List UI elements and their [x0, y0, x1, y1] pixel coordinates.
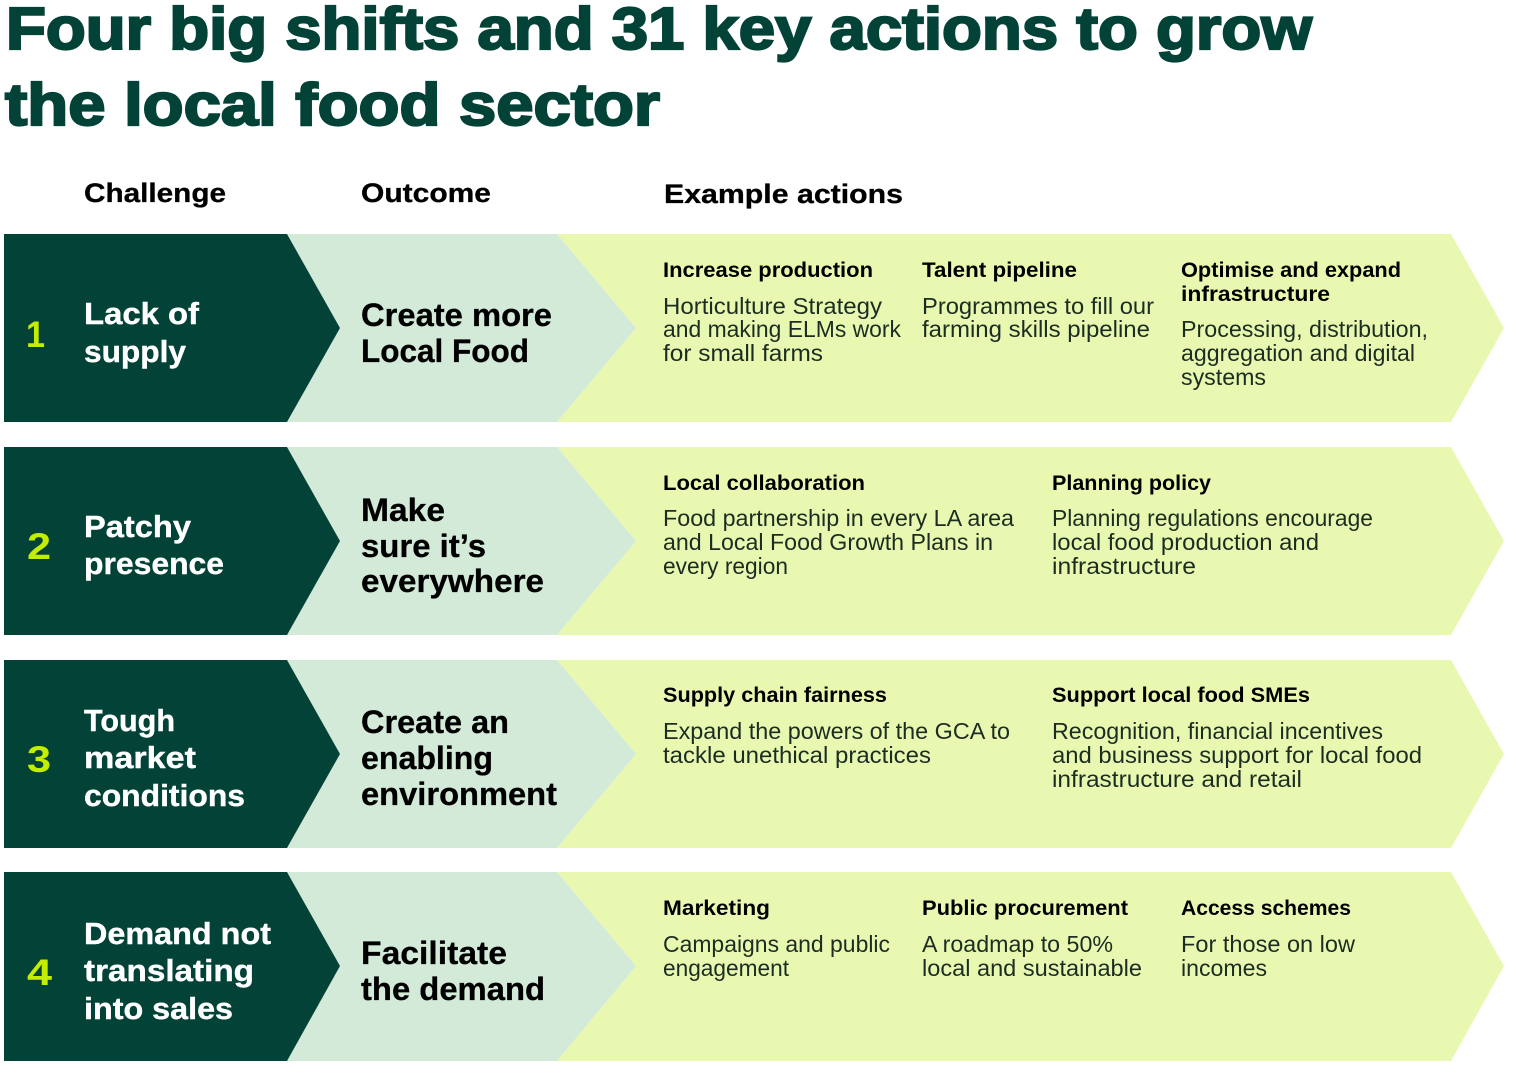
action: optimise and expand infrastructure: infrastructure: [1181, 283, 1330, 306]
row 2 challenge chevron: [4, 447, 340, 635]
action: planning policy: local food production and: [1052, 529, 1319, 555]
row 3 outcome chevron: [287, 660, 636, 848]
action: planning policy: Planning policy: [1052, 472, 1211, 495]
action: public procurement: [922, 897, 1142, 981]
action: support local food SMEs: and business support for local food: [1052, 742, 1422, 768]
action: increase production: [663, 259, 901, 366]
action: talent pipeline: [922, 259, 1154, 342]
action: optimise and expand infrastructure: Processing, distribution,: [1181, 316, 1428, 342]
action: increase production: Increase production: [663, 259, 873, 282]
row 1 challenge chevron: [4, 234, 340, 422]
action: marketing: engagement: [663, 955, 790, 981]
row 3 outcome text: [361, 704, 557, 812]
action: public procurement: A roadmap to 50%: [922, 931, 1113, 957]
action: planning policy: Planning regulations encourage: [1052, 505, 1373, 531]
column headings: Outcome: [361, 178, 491, 208]
row 1 outcome chevron: [287, 234, 636, 422]
action: increase production: and making ELMs work: [663, 316, 901, 342]
row 4 outcome text: the demand: [361, 971, 545, 1007]
action: marketing: Marketing: [663, 897, 770, 920]
row 4: demand not translating into sales: [4, 872, 1504, 1061]
column headings: [84, 178, 903, 209]
column headings: Challenge: [84, 178, 226, 208]
action: access schemes: incomes: [1181, 955, 1267, 981]
action: supply chain fairness: Expand the powers of the GCA to: [663, 718, 1010, 744]
title: [5, 0, 1312, 138]
action: marketing: [663, 897, 890, 981]
action: talent pipeline: farming skills pipeline: [922, 316, 1150, 342]
action: supply chain fairness: [663, 684, 1010, 768]
action: planning policy: [1052, 472, 1373, 579]
action: talent pipeline: Talent pipeline: [922, 259, 1077, 282]
action: planning policy: infrastructure: [1052, 553, 1196, 579]
row 1 challenge text: [84, 296, 200, 369]
row 4 challenge text: translating: [84, 953, 254, 988]
row 4 challenge text: Demand not: [84, 916, 271, 951]
action: local collaboration: Local collaboration: [663, 472, 865, 495]
row 4 challenge chevron: [4, 872, 340, 1061]
action: support local food SMEs: infrastructure and retail: [1052, 766, 1302, 792]
row 4 outcome chevron: [287, 872, 636, 1061]
row 1 challenge text: Lack of: [84, 296, 200, 331]
action: access schemes: Access schemes: [1181, 897, 1351, 920]
action: access schemes: [1181, 897, 1355, 981]
row 4 actions chevron: [557, 872, 1504, 1061]
row 2 challenge text: Patchy: [84, 509, 192, 544]
action: supply chain fairness: Supply chain fairness: [663, 684, 887, 707]
row 4 challenge text: into sales: [84, 991, 233, 1026]
row 2 challenge text: presence: [84, 546, 224, 581]
row 3: tough market conditions: [4, 660, 1504, 848]
action: public procurement: Public procurement: [922, 897, 1128, 920]
title: the local food sector: [5, 72, 660, 138]
action: supply chain fairness: tackle unethical practices: [663, 742, 931, 768]
action: support local food SMEs: Support local food SMEs: [1052, 684, 1310, 707]
row 2 actions chevron: [557, 447, 1504, 635]
row 1: lack of supply: [4, 234, 1504, 422]
row 3 challenge text: market: [84, 740, 196, 775]
row 1 actions chevron: [557, 234, 1504, 422]
row 1 outcome text: Local Food: [361, 333, 529, 369]
action: local collaboration: Food partnership in every LA area: [663, 505, 1014, 531]
action: increase production: Horticulture Strategy: [663, 293, 883, 319]
action: support local food SMEs: Recognition, financial incentives: [1052, 718, 1383, 744]
column headings: Example actions: [664, 179, 903, 209]
action: optimise and expand infrastructure: systems: [1181, 364, 1266, 390]
row 2 challenge text: [84, 509, 224, 581]
row 3 challenge text: [84, 703, 245, 813]
action: support local food SMEs: [1052, 684, 1422, 792]
action: local collaboration: every region: [663, 553, 788, 579]
row 1 outcome text: [361, 297, 552, 369]
row 2 outcome text: sure it’s: [361, 528, 486, 564]
row 3 outcome text: environment: [361, 776, 557, 812]
action: optimise and expand infrastructure: aggregation and digital: [1181, 340, 1415, 366]
row 4 outcome text: [361, 935, 545, 1007]
row 1 challenge text: supply: [84, 334, 187, 369]
row 3 number: 3: [27, 739, 51, 780]
action: public procurement: local and sustainable: [922, 955, 1142, 981]
row 4 number: 4: [27, 952, 53, 993]
row 2 outcome text: everywhere: [361, 563, 544, 599]
action: talent pipeline: Programmes to fill our: [922, 293, 1154, 319]
row 4 challenge text: [84, 916, 271, 1026]
row 2: patchy presence: [4, 447, 1504, 635]
row 2 number: 2: [27, 526, 51, 567]
row 1 outcome text: Create more: [361, 297, 552, 333]
row 2 outcome text: Make: [361, 492, 445, 528]
row 4 outcome text: Facilitate: [361, 935, 507, 971]
action: optimise and expand infrastructure: Optimise and expand: [1181, 259, 1401, 282]
row 3 challenge text: conditions: [84, 778, 245, 813]
action: access schemes: For those on low: [1181, 931, 1355, 957]
row 3 challenge chevron: [4, 660, 340, 848]
action: increase production: for small farms: [663, 340, 823, 366]
row 2 outcome text: [361, 492, 544, 599]
action: local collaboration: [663, 472, 1014, 579]
row 3 actions chevron: [557, 660, 1504, 848]
action: optimise and expand infrastructure: [1181, 259, 1428, 390]
action: marketing: Campaigns and public: [663, 931, 890, 957]
action: local collaboration: and Local Food Growth Plans in: [663, 529, 993, 555]
row 3 challenge text: Tough: [84, 703, 175, 738]
row 1 number: 1: [26, 314, 45, 355]
row 3 outcome text: enabling: [361, 740, 493, 776]
row 2 outcome chevron: [287, 447, 636, 635]
row 3 outcome text: Create an: [361, 704, 509, 740]
